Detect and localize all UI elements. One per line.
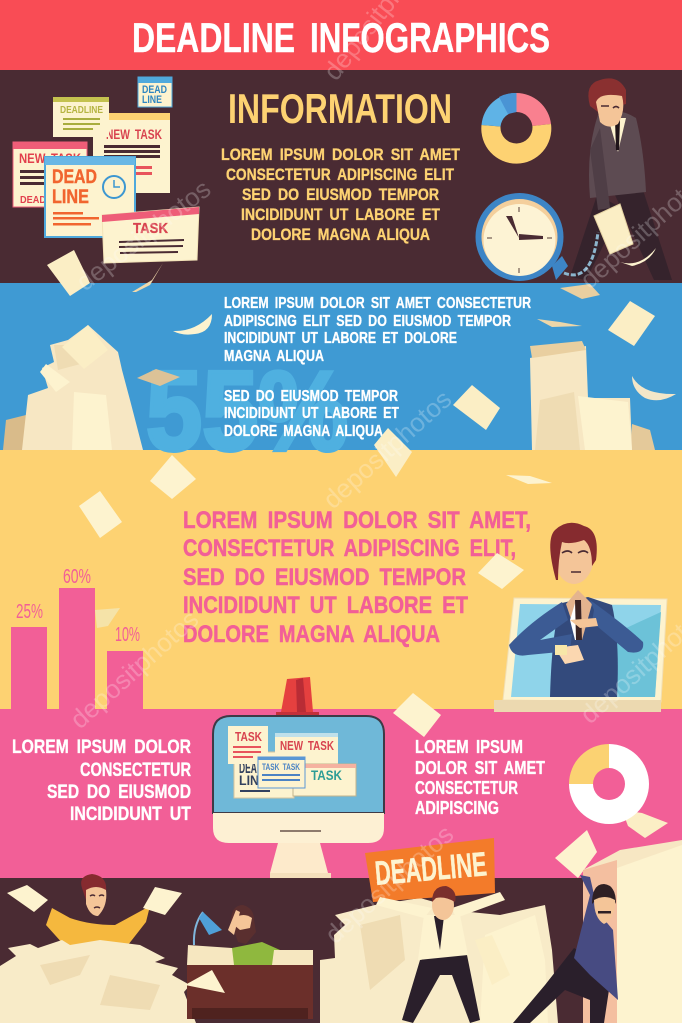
paper: flying sheets blue	[47, 250, 676, 477]
text block: pink lorem: SED DO EIUSMOD TEMPOR	[183, 564, 466, 591]
icon: red alarm beacon	[276, 677, 319, 715]
panel: blue band	[0, 283, 682, 450]
icon: deadline sign	[365, 838, 495, 902]
text block: blue upper paragraph: INCIDIDUNT UT LABORE ET DOLORE	[224, 330, 457, 347]
paper: flying sheets yellow	[79, 455, 552, 628]
icon: white yellow donut chart	[569, 744, 649, 824]
text block: pink left: CONSECTETUR	[80, 759, 191, 781]
bar chart: 60%	[63, 566, 91, 588]
text block: blue lower paragraph: DOLORE MAGNA ALIQUA	[224, 423, 383, 440]
text block: pink left	[12, 736, 191, 825]
window: deadline olive	[53, 97, 109, 137]
heading: information: INFORMATION	[228, 85, 452, 132]
paper stack: right tower	[583, 840, 682, 1023]
paper: sheet behind donut	[622, 810, 668, 838]
big faded number: 55%	[146, 348, 348, 474]
figure: man with moustache on tower	[513, 875, 618, 1023]
window: monitor dead line: LIN	[239, 772, 259, 788]
text block: pink lorem: INCIDIDUNT UT LABORE ET	[183, 592, 468, 619]
watermark: stock text: depositphotos	[319, 819, 459, 949]
window: new task yellow	[93, 113, 170, 193]
window: monitor teal task: TASK	[311, 767, 342, 783]
icon: clock shackle	[476, 193, 568, 281]
desk with bearded worker	[185, 905, 313, 1019]
panel: dark information band	[0, 70, 682, 283]
text block: information body	[221, 145, 461, 244]
text block: pink right: CONSECTETUR	[415, 777, 518, 798]
window: dead line blue with clock	[45, 157, 135, 237]
icon: chain	[564, 232, 598, 275]
panel: red title band	[0, 0, 682, 70]
window: new task yellow: NEW TASK	[106, 126, 162, 142]
title: DEADLINE	[132, 14, 295, 61]
window: monitor dead line	[234, 752, 294, 798]
paper pile: left mound	[0, 940, 196, 1023]
paper: sheet on pink edge	[393, 693, 441, 737]
text block: pink right: ADIPISCING	[415, 797, 499, 818]
window: monitor dead line: DEAD	[239, 760, 263, 777]
window: monitor new task: NEW TASK	[280, 738, 334, 753]
paper stack: right	[530, 341, 655, 450]
figure: man buried in paper pile	[7, 874, 182, 945]
text block: information body: INCIDIDUNT UT LABORE ET	[241, 205, 441, 224]
figure: man holding sign	[376, 886, 510, 1023]
window: dead line blue with clock: DEAD	[52, 167, 97, 188]
bar chart: 10%	[115, 624, 140, 646]
window: new task red	[13, 142, 87, 207]
text block: information body: CONSECTETUR ADIPISCING ELIT	[226, 165, 454, 184]
window: new task red: NEW TASK	[19, 150, 81, 166]
window: task red: TASK	[133, 220, 168, 237]
text block: pink lorem: CONSECTETUR ADIPISCING ELIT,	[183, 535, 516, 562]
text block: blue upper paragraph: ADIPISCING ELIT SED DO EIUSMOD TEMPOR	[224, 313, 511, 330]
window: small dead line	[138, 77, 172, 107]
text block: pink lorem: DOLORE MAGNA ALIQUA	[183, 621, 440, 648]
title	[132, 14, 550, 61]
window: dead line blue with clock: LINE	[52, 187, 89, 208]
bar chart: 25%	[16, 601, 43, 623]
text block: blue lower paragraph	[224, 388, 399, 440]
window: monitor task red	[228, 726, 268, 764]
window: monitor teal task	[293, 764, 356, 796]
text block: pink left: LOREM IPSUM DOLOR	[12, 736, 191, 758]
text block: blue lower paragraph: INCIDIDUNT UT LABORE ET	[224, 405, 399, 422]
window: monitor new task	[275, 733, 338, 769]
window: monitor blue task: TASK TASK	[262, 762, 300, 773]
laptop	[494, 598, 667, 712]
bar chart	[11, 566, 143, 709]
icon: desk lamp	[194, 912, 222, 945]
window: small dead line: LINE	[142, 94, 162, 106]
icon: monitor with task windows	[213, 716, 384, 878]
text block: pink lorem	[183, 507, 531, 648]
title: INFOGRAPHICS	[310, 14, 550, 61]
text block: blue upper paragraph	[224, 295, 531, 365]
text block: blue upper paragraph: LOREM IPSUM DOLOR SIT AMET CONSECTETUR	[224, 295, 531, 312]
paper: curl near stack	[555, 830, 597, 878]
icon: yellow blue pink donut chart	[481, 93, 551, 164]
figure: man in laptop	[494, 523, 667, 712]
text block: pink left: SED DO EIUSMOD	[47, 781, 191, 803]
watermark: stock text: depositphotos	[64, 604, 204, 734]
text block: pink lorem: LOREM IPSUM DOLOR SIT AMET,	[183, 507, 531, 534]
text block: information body: DOLORE MAGNA ALIQUA	[251, 225, 430, 244]
text block: blue lower paragraph: SED DO EIUSMOD TEMPOR	[224, 388, 398, 405]
paper stack: left	[3, 325, 143, 450]
window: small dead line: DEAD	[142, 84, 167, 96]
window: new task red: DEAD	[20, 195, 46, 206]
text block: information body: SED DO EIUSMOD TEMPOR	[242, 185, 439, 204]
window: monitor blue task	[258, 757, 305, 788]
figure: chained businessman	[570, 78, 672, 280]
watermark: stock text: depositphotos	[70, 173, 216, 297]
icon: task windows cluster	[13, 77, 199, 263]
window: monitor task red: TASK	[235, 729, 262, 744]
icon: deadline sign: DEADLINE	[373, 845, 488, 893]
text block: pink right	[415, 736, 546, 818]
watermark: stock text: depositphotos	[317, 384, 457, 514]
text block: information body: LOREM IPSUM DOLOR SIT AMET	[221, 145, 461, 164]
text block: pink left: INCIDIDUNT UT	[70, 803, 191, 825]
panel: dark bottom band	[0, 878, 682, 1023]
paper pile: center	[320, 898, 558, 1023]
window: deadline olive: DEADLINE	[60, 105, 103, 116]
text block: pink right: LOREM IPSUM	[415, 736, 523, 757]
text block: pink right: DOLOR SIT AMET	[415, 757, 546, 778]
panel: pink band	[0, 709, 682, 878]
text block: blue upper paragraph: MAGNA ALIQUA	[224, 348, 324, 365]
panel: yellow band	[0, 450, 682, 709]
window: task red	[102, 207, 199, 263]
